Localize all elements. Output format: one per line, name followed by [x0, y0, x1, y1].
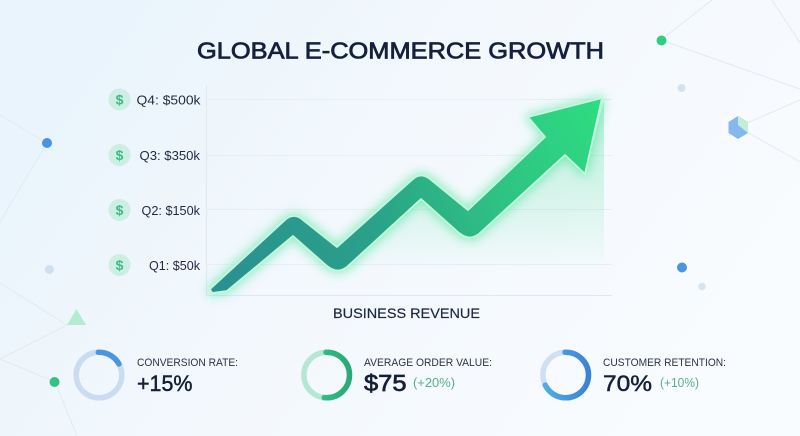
stat: conversion rate: [76, 352, 238, 398]
stat: conversion rate: CONVERSION RATE:: [137, 357, 238, 369]
stat: customer retention: CUSTOMER RETENTION:: [603, 357, 726, 369]
title: GLOBAL E-COMMERCE GROWTH: [197, 38, 604, 64]
axis label: Q1: $: [116, 257, 124, 273]
icon: blue node left: [42, 138, 52, 148]
icon: pale node right: [698, 283, 706, 290]
donut: 15 percent: [76, 352, 122, 398]
stat: average order value: AVERAGE ORDER VALUE:: [364, 357, 492, 369]
chart: revenue growth: [108, 85, 612, 321]
stat: average order value: [304, 352, 492, 398]
axis label: Q2: Q2: $150k: [142, 204, 201, 218]
x axis title: BUSINESS REVENUE: [333, 305, 480, 321]
growth arrow: [210, 98, 602, 293]
icon: green triangle: [67, 309, 86, 325]
icon: green node bottom left: [50, 377, 60, 387]
stat: customer retention: 70%: [603, 371, 652, 396]
donut: 70 percent: [543, 352, 588, 398]
stat: average order value: $75: [364, 370, 406, 396]
axis label: Q2: [108, 199, 201, 221]
stat: average order value: (+20%): [413, 375, 455, 390]
stat: customer retention: (+10%): [660, 375, 699, 390]
stat: customer retention: [543, 352, 726, 398]
axis label: Q3: $: [116, 147, 124, 163]
donut: 53 percent: [304, 352, 350, 398]
axis label: Q1: [108, 254, 201, 276]
axis label: Q2: $: [116, 202, 124, 218]
area under arrow: [338, 100, 604, 272]
axis label: Q4: Q4: $500k: [136, 94, 201, 108]
icon: pale node top right: [678, 84, 686, 92]
axis label: Q3: [108, 144, 201, 166]
arrow glow: [210, 98, 602, 293]
axis label: Q3: Q3: $350k: [140, 149, 201, 163]
icon: green node top right: [656, 36, 666, 46]
stat: conversion rate: +15%: [137, 371, 192, 396]
icon: hexagon cube: [728, 116, 748, 139]
axis label: Q4: [108, 88, 201, 110]
icon: blue node right: [677, 262, 687, 272]
icon: pale node left: [45, 265, 54, 274]
axis label: Q1: Q1: $50k: [149, 259, 201, 273]
axis label: Q4: $: [116, 92, 124, 108]
chart grid and axes: [206, 85, 612, 296]
